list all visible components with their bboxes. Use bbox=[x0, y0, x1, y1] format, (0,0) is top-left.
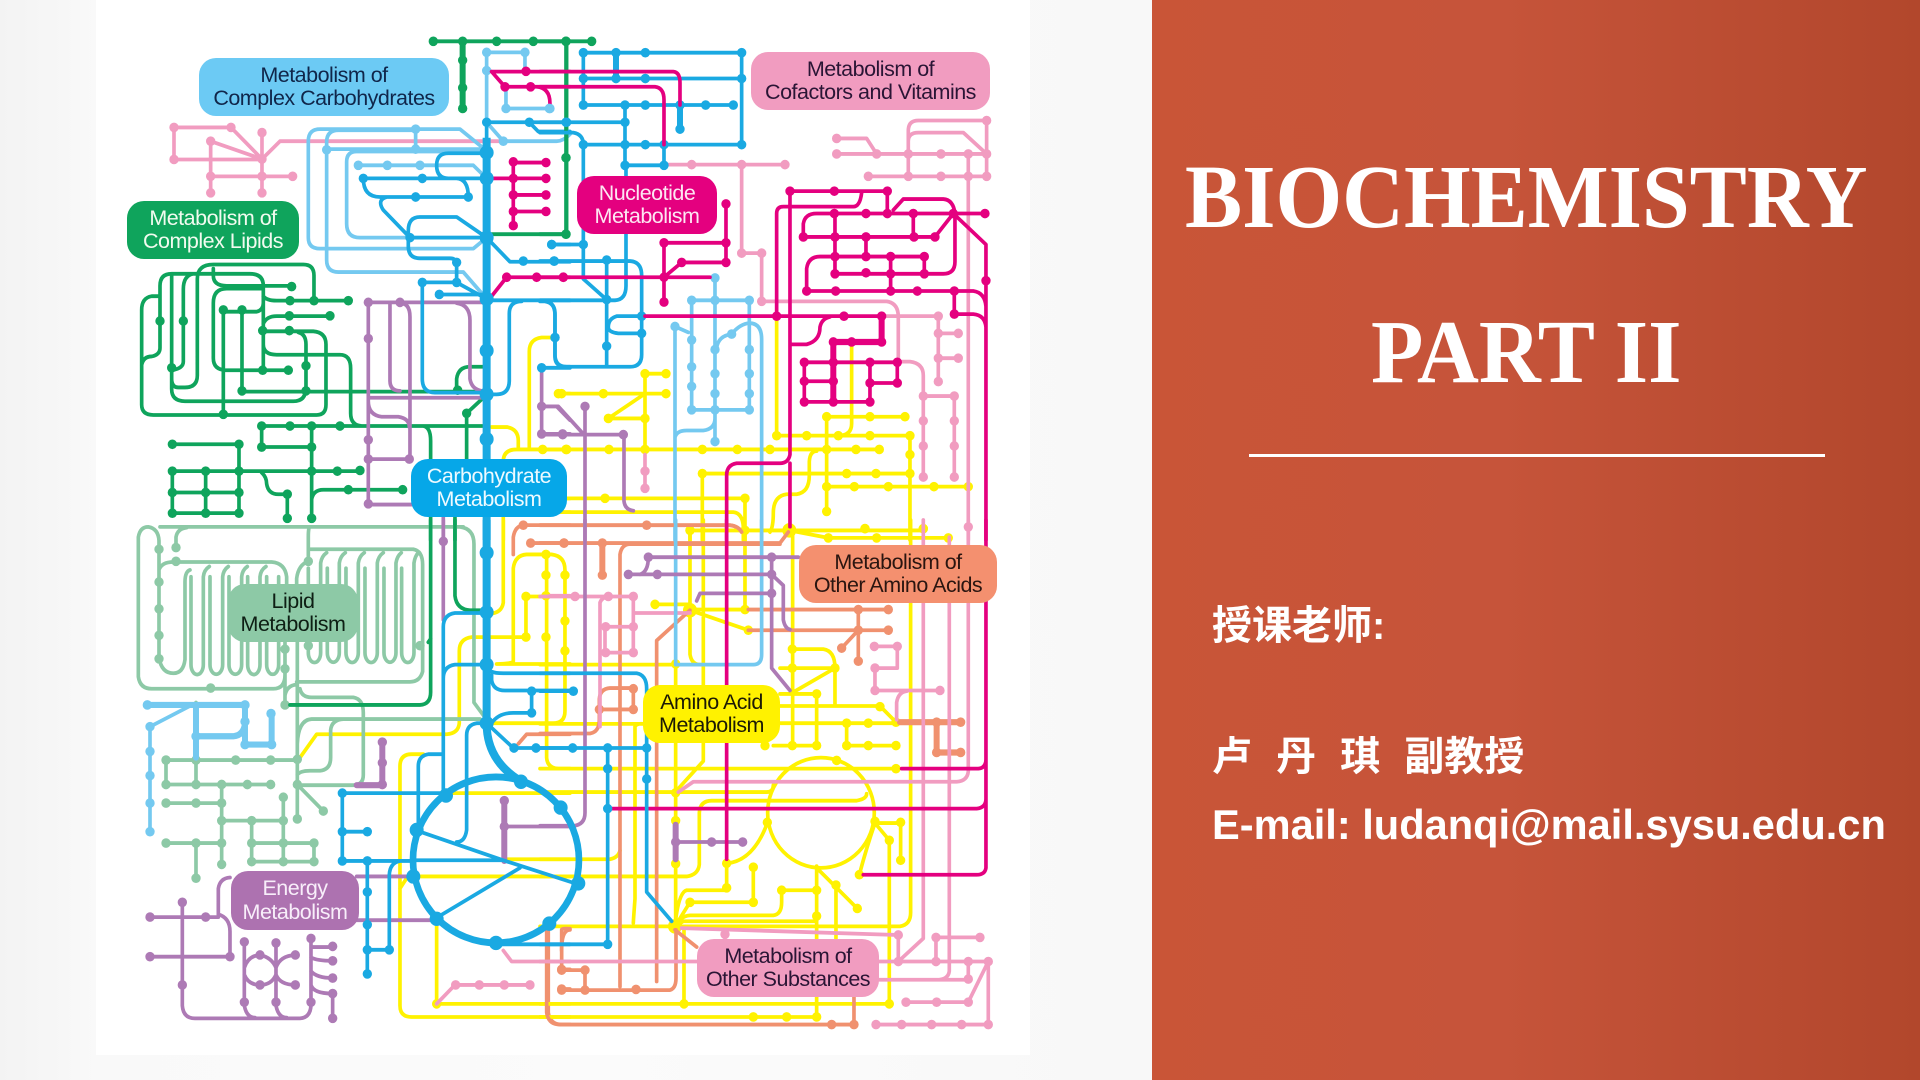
blue lines, lower left bbox=[342, 613, 570, 974]
pink cofactor lines, upper right bbox=[645, 121, 987, 540]
salmon other amino acid lines, lower right bbox=[540, 525, 961, 1025]
purple energy lines, upper left bbox=[368, 302, 570, 540]
label: Metabolism of Other Substances bbox=[697, 939, 879, 997]
label: Lipid Metabolism: Lipid bbox=[272, 588, 314, 612]
label: Metabolism of Complex Carbohydrates: Complex Carbohydrates bbox=[213, 86, 435, 110]
label: Energy Metabolism: Metabolism bbox=[243, 900, 347, 924]
label: Metabolism of Complex Lipids: Metabolism of bbox=[149, 206, 277, 230]
label: Metabolism of Complex Lipids bbox=[127, 201, 299, 259]
label: Carbohydrate Metabolism: Metabolism bbox=[437, 487, 541, 511]
label: Metabolism of Cofactors and Vitamins: Cofactors and Vitamins bbox=[765, 80, 976, 104]
purple lines, lower right bbox=[540, 520, 798, 859]
label: Carbohydrate Metabolism: Carbohydrate bbox=[427, 464, 551, 488]
map region: upper right bbox=[540, 41, 987, 540]
label: Metabolism of Other Amino Acids bbox=[799, 545, 997, 603]
light blue lines, lower left bbox=[147, 705, 272, 832]
label: Carbohydrate Metabolism bbox=[411, 459, 567, 517]
instructor email: E-mail: ludanqi@mail.sysu.edu.cn bbox=[1212, 801, 1886, 848]
light blue lines, lower right bbox=[676, 520, 762, 665]
label: Metabolism of Complex Carbohydrates bbox=[199, 58, 449, 116]
pink lines, lower left bbox=[437, 596, 570, 1004]
label: Metabolism of Other Substances: Other Substances bbox=[706, 967, 870, 991]
yellow amino acid lines, lower right bbox=[540, 520, 948, 1017]
white map sheet bbox=[96, 0, 1030, 1055]
magenta nucleotide lines, upper left bbox=[492, 71, 570, 296]
metabolic pathway map bbox=[136, 36, 993, 1030]
salmon other amino acid line, upper right bbox=[540, 525, 742, 532]
blue carbohydrate lines, upper left bbox=[363, 122, 570, 540]
yellow amino acid lines, upper right bbox=[540, 320, 968, 540]
salmon other amino acid lines, lower left bbox=[513, 525, 570, 1025]
label: Lipid Metabolism: Metabolism bbox=[241, 612, 345, 636]
map region: lower left bbox=[138, 520, 570, 1025]
purple lines, upper right bbox=[540, 406, 633, 540]
instructor heading: 授课老师: bbox=[1212, 604, 1385, 648]
label: Metabolism of Cofactors and Vitamins bbox=[751, 52, 990, 110]
green lines, lower left bbox=[290, 520, 487, 705]
label: Nucleotide Metabolism bbox=[577, 176, 717, 234]
magenta nucleotide lines, upper right bbox=[540, 72, 986, 540]
label: Energy Metabolism bbox=[231, 871, 359, 930]
blue lines, lower right bbox=[540, 673, 672, 944]
label: Metabolism of Other Substances: Metabolism of bbox=[724, 944, 852, 968]
title: Biochemistry: BIOCHEMISTRY bbox=[1185, 148, 1868, 247]
label: Energy Metabolism: Energy bbox=[262, 876, 328, 900]
purple energy metabolism lines bbox=[150, 520, 570, 1018]
pink cofactor lines, upper left bbox=[174, 127, 503, 193]
map region: upper left bbox=[142, 41, 570, 540]
pink other substance lines bbox=[540, 520, 988, 1025]
central carbohydrate trunk and citric acid ring bbox=[413, 520, 579, 943]
label: Metabolism of Other Amino Acids: Metabolism of bbox=[834, 550, 962, 574]
label: Lipid Metabolism bbox=[228, 584, 358, 642]
green complex lipid lines bbox=[142, 41, 570, 540]
label: Amino Acid Metabolism bbox=[643, 685, 780, 743]
yellow amino acid lines, lower left bbox=[300, 520, 570, 1017]
mint lipid metabolism lines bbox=[138, 527, 487, 878]
label: Amino Acid Metabolism: Amino Acid bbox=[660, 690, 763, 714]
label: Metabolism of Cofactors and Vitamins: Metabolism of bbox=[807, 56, 934, 80]
divider line bbox=[1249, 454, 1825, 457]
yellow amino acid lines, upper left bbox=[492, 338, 570, 540]
label: Nucleotide Metabolism: Metabolism bbox=[595, 204, 699, 228]
map region: lower right bbox=[540, 520, 988, 1025]
magenta lines, lower right bbox=[610, 520, 986, 875]
label: Nucleotide Metabolism: Nucleotide bbox=[599, 180, 695, 204]
subtitle: Part II: PART II bbox=[1371, 303, 1681, 402]
label: Metabolism of Complex Lipids: Complex Lipids bbox=[143, 229, 283, 253]
label: Metabolism of Complex Carbohydrates: Metabolism of bbox=[260, 62, 388, 86]
green lines, upper right bbox=[540, 41, 592, 234]
light blue lines, upper right bbox=[549, 108, 762, 540]
label: Amino Acid Metabolism: Metabolism bbox=[659, 713, 764, 737]
right title panel bbox=[1152, 0, 1920, 1080]
instructor name: 卢 丹 琪 副教授 bbox=[1212, 735, 1524, 779]
light blue complex carbohydrate lines bbox=[308, 52, 570, 299]
blue lines, upper right bbox=[540, 53, 742, 367]
label: Metabolism of Other Amino Acids: Other Amino Acids bbox=[814, 573, 982, 597]
slide background bbox=[0, 0, 1152, 1080]
